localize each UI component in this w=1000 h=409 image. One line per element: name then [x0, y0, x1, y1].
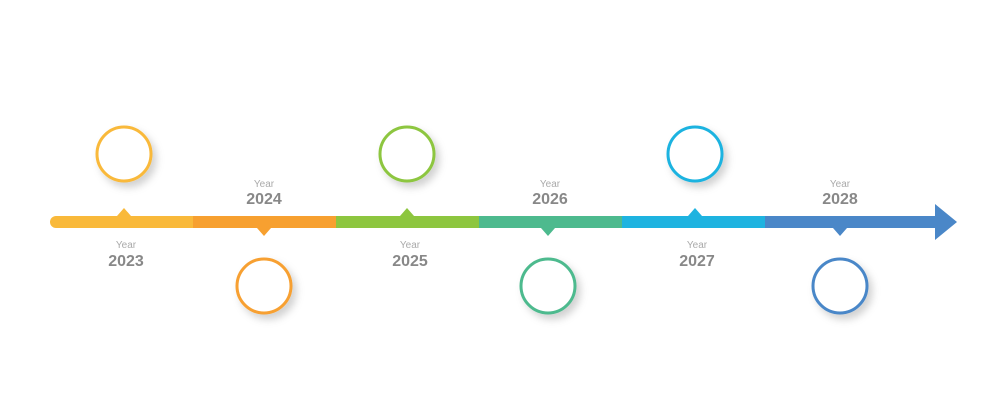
milestone 2023: 2023: [108, 253, 144, 270]
milestone 2025: [380, 127, 434, 270]
milestone 2023: [97, 127, 151, 270]
milestone 2025: Year: [400, 240, 421, 251]
milestone 2026: [521, 179, 575, 313]
milestone 2027: 2027: [679, 253, 715, 270]
milestone 2024: 2024: [246, 191, 282, 208]
milestone 2028: [813, 179, 867, 313]
milestone 2026: 2026: [532, 191, 568, 208]
milestone 2026: Year: [540, 179, 561, 190]
milestone 2028: 2028: [822, 191, 858, 208]
milestone 2027: [668, 127, 722, 270]
milestone 2025: 2025: [392, 253, 428, 270]
milestone 2023: Year: [116, 240, 137, 251]
milestone 2028: Year: [830, 179, 851, 190]
arrow head: [935, 204, 957, 240]
milestone 2024: Year: [254, 179, 275, 190]
milestone 2024: [237, 179, 291, 313]
milestone 2027: Year: [687, 240, 708, 251]
timeline bar: [50, 204, 957, 240]
